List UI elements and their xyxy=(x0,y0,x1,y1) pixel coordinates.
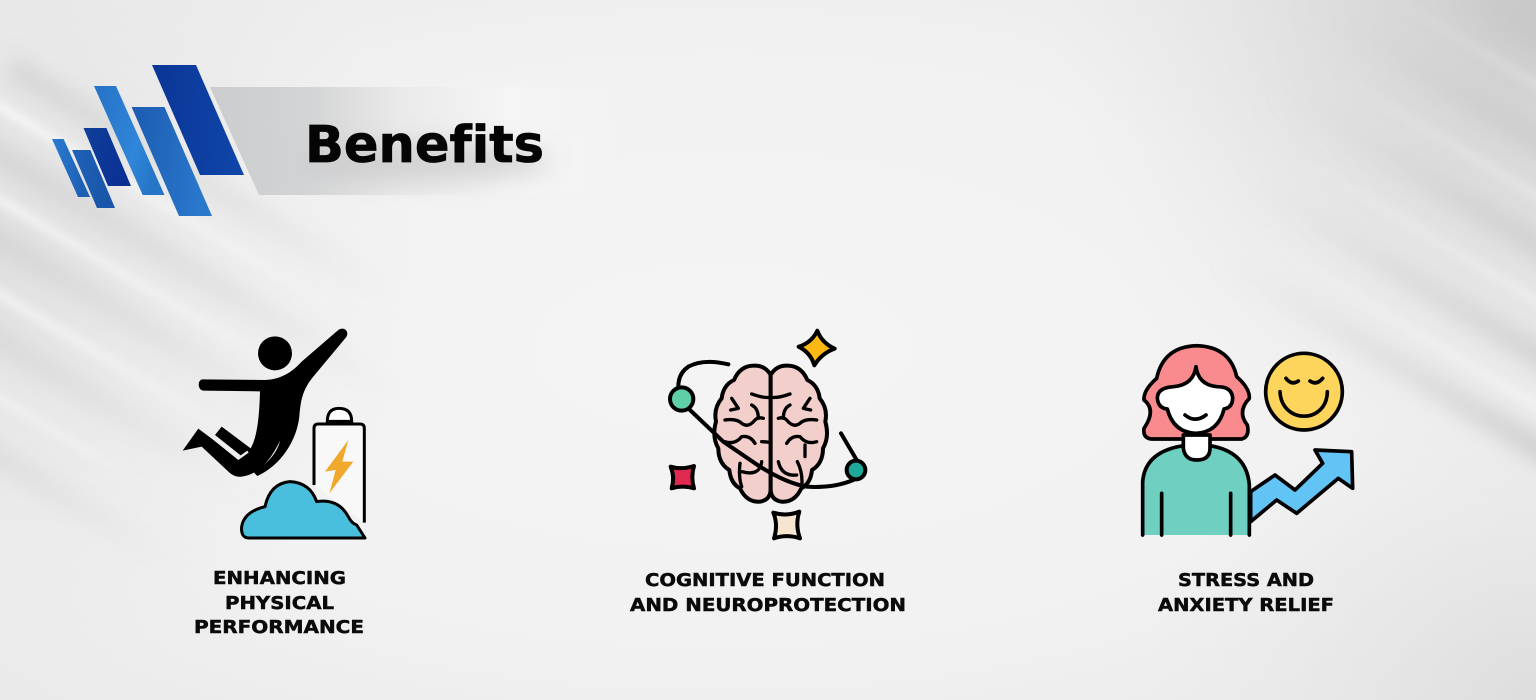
label: enhancing physical performance: PHYSICAL xyxy=(225,593,334,614)
label: cognitive function and neuroprotection xyxy=(630,570,906,616)
label: stress and anxiety relief: ANXIETY RELIEF xyxy=(1158,595,1334,616)
star: gold xyxy=(799,331,835,365)
orbit dot left xyxy=(670,387,693,411)
logo: blue bars xyxy=(52,65,244,216)
icon: woman with smiley and rising arrow xyxy=(1143,346,1353,535)
title: Benefits xyxy=(305,116,544,175)
label: enhancing physical performance xyxy=(194,568,364,638)
face xyxy=(1157,367,1233,433)
cloud xyxy=(242,482,365,538)
torso xyxy=(1143,446,1249,535)
rising arrow xyxy=(1251,450,1353,522)
brain xyxy=(714,366,827,502)
body xyxy=(183,329,347,477)
label: enhancing physical performance: PERFORMANCE xyxy=(194,617,364,638)
orbit dot right xyxy=(847,461,865,479)
label: stress and anxiety relief: STRESS AND xyxy=(1178,570,1314,591)
neck xyxy=(1183,435,1210,460)
star: cream xyxy=(773,512,800,538)
orbit lines xyxy=(678,362,857,487)
star: red xyxy=(671,466,694,488)
heading band xyxy=(210,87,625,195)
hair xyxy=(1144,346,1249,439)
smiley xyxy=(1266,353,1342,430)
icon: jumping figure with battery and cloud xyxy=(183,329,365,538)
battery xyxy=(314,408,364,523)
label: enhancing physical performance: ENHANCING xyxy=(213,568,346,589)
label: cognitive function and neuroprotection: COGNITIVE FUNCTION xyxy=(645,570,885,591)
icon: brain with orbits and stars xyxy=(670,331,865,538)
head xyxy=(258,336,292,370)
soft title shadow xyxy=(300,142,550,182)
label: stress and anxiety relief xyxy=(1158,570,1334,616)
label: cognitive function and neuroprotection: AND NEUROPROTECTION xyxy=(630,595,906,616)
